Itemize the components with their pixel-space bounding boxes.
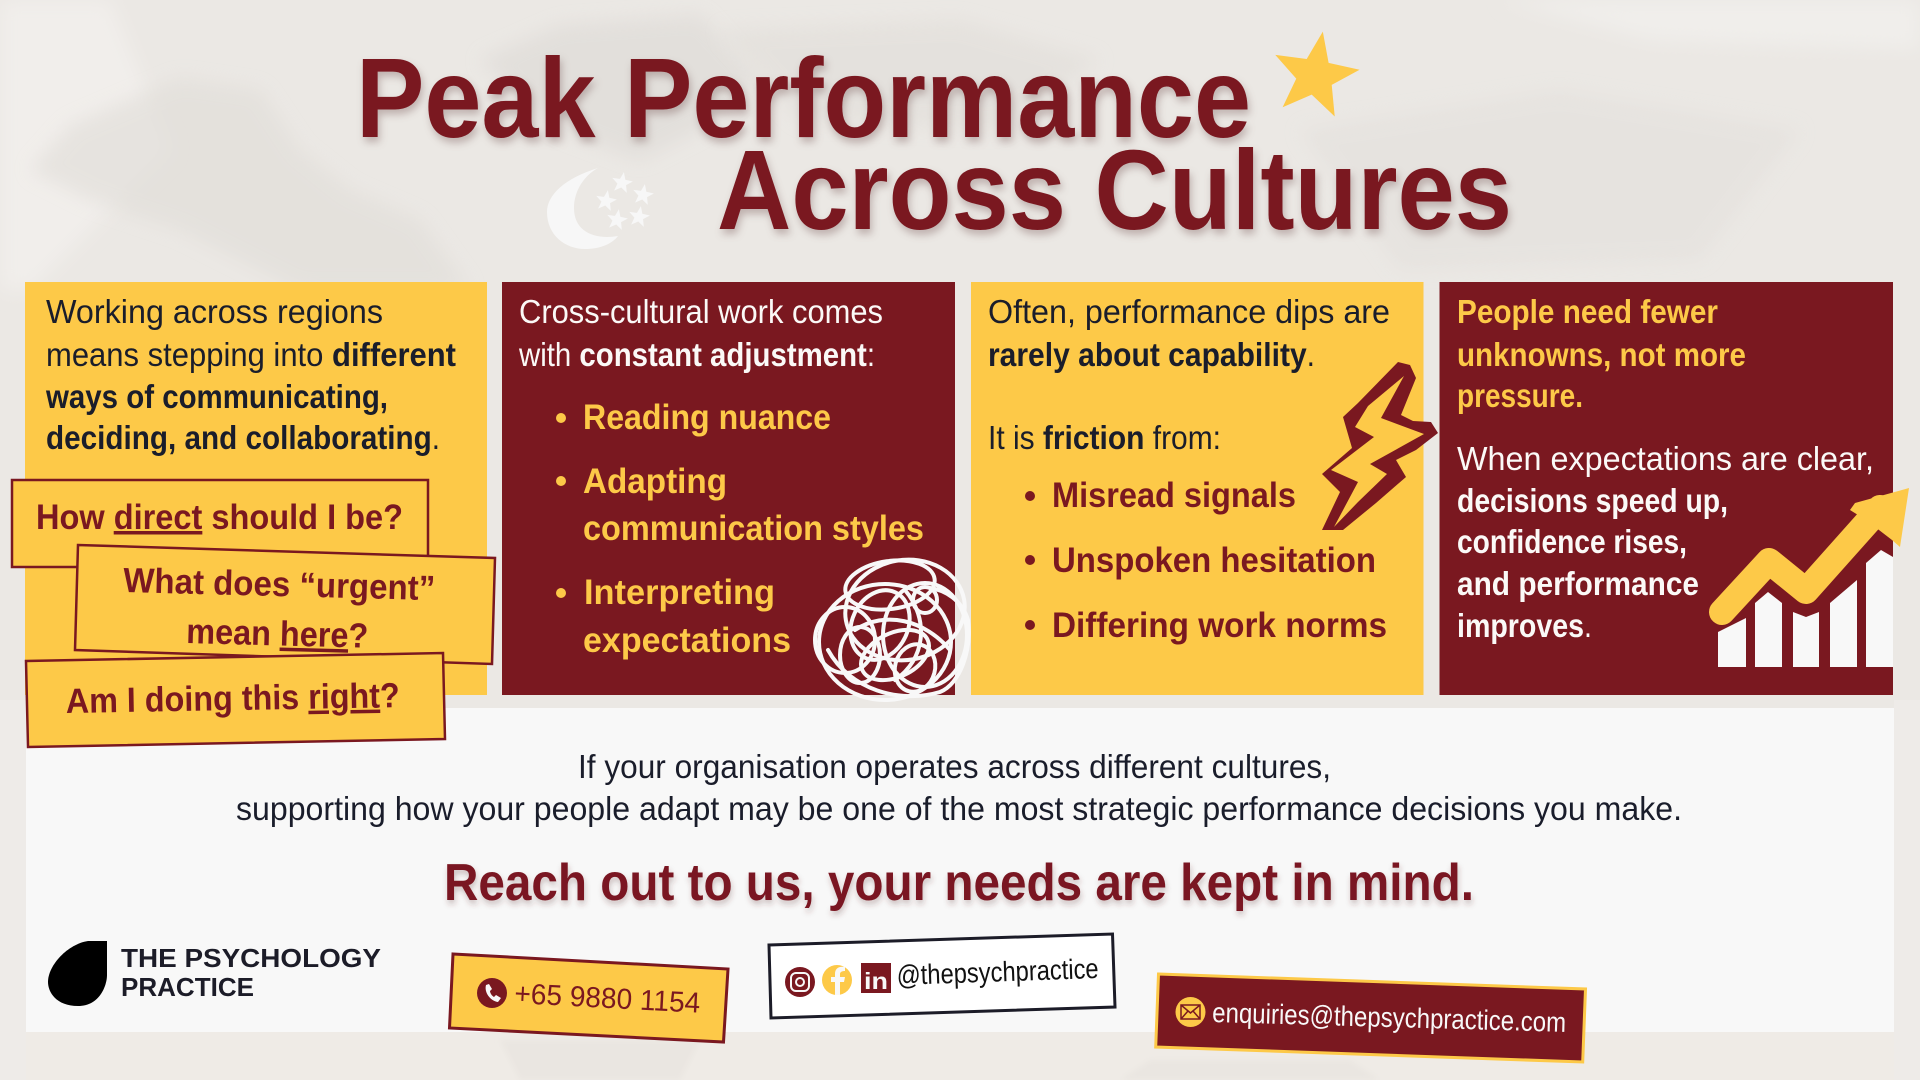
panel: constant adjustment: Cross-cultural work comes	[519, 293, 883, 330]
contact: social media: in	[864, 968, 888, 994]
panel: friction: It is friction from:	[988, 419, 1221, 456]
panel: fewer unknowns: unknowns, not more	[1457, 336, 1746, 373]
panel: fewer unknowns: decisions speed up,	[1457, 482, 1728, 519]
callout: what does urgent mean: What does “urgent”	[123, 561, 436, 608]
callout: what does urgent mean	[75, 545, 495, 664]
panel: working across regions: means stepping into different	[46, 336, 456, 373]
panel: friction: Misread signals	[1052, 476, 1296, 515]
panel: constant adjustment: with constant adjustment:	[518, 336, 875, 373]
panel: friction: rarely about capability.	[988, 336, 1315, 373]
callout: what does urgent mean: mean here?	[186, 612, 369, 656]
panel: constant adjustment: communication styles	[583, 509, 924, 548]
title: Across Cultures	[717, 127, 1512, 253]
panel: constant adjustment: Adapting	[583, 462, 727, 501]
callout: am I doing this right	[26, 653, 445, 747]
panel: fewer unknowns: pressure.	[1457, 377, 1583, 414]
panel: fewer unknowns: improves.	[1457, 607, 1592, 644]
closing statement: supporting how your people adapt may be one of the most strategic performance decisions you make.	[236, 790, 1682, 827]
closing statement	[236, 748, 1682, 827]
logo: the psychology practice: THE PSYCHOLOGY	[121, 943, 381, 973]
panel: friction	[971, 282, 1424, 695]
panel: working across regions: ways of communicating,	[45, 378, 388, 415]
panel: constant adjustment: Reading nuance	[583, 398, 831, 437]
icon: scribble knot	[815, 550, 973, 700]
closing statement: If your organisation operates across different cultures,	[578, 748, 1331, 785]
panel: constant adjustment	[502, 282, 955, 695]
callout: how direct	[12, 480, 428, 567]
contact: social media	[769, 934, 1115, 1018]
panel: working across regions	[25, 282, 487, 695]
panel: constant adjustment: expectations	[583, 621, 791, 660]
icon: yellow star	[1267, 24, 1365, 119]
title: Peak Performance	[356, 35, 1251, 161]
contact: email	[1156, 974, 1586, 1062]
icon: lightning bolt	[1322, 362, 1438, 530]
call to action: Reach out to us, your needs are kept in mind.	[444, 854, 1474, 912]
callout: am I doing this right: Am I doing this right?	[65, 676, 400, 721]
contact: social media: @thepsychpractice	[896, 953, 1099, 991]
panel: working across regions: Working across regions	[46, 293, 383, 330]
logo: the psychology practice	[48, 941, 381, 1006]
contact: phone	[450, 954, 728, 1042]
panel: friction: Differing work norms	[1052, 606, 1387, 645]
bottom white panel	[26, 708, 1894, 1032]
logo: the psychology practice: PRACTICE	[121, 972, 254, 1002]
bar chart with rising arrow	[1718, 488, 1909, 667]
title	[356, 35, 1512, 253]
panel: fewer unknowns: When expectations are clear,	[1457, 440, 1874, 477]
panel: fewer unknowns: confidence rises,	[1457, 523, 1687, 560]
callout: how direct: How direct should I be?	[36, 498, 403, 537]
panel: fewer unknowns: People need fewer	[1457, 293, 1718, 330]
panel: fewer unknowns	[1440, 282, 1893, 695]
panel: friction: Unspoken hesitation	[1052, 541, 1376, 580]
panel: constant adjustment: Interpreting	[584, 573, 775, 612]
panel: working across regions: deciding, and collaborating.	[46, 419, 440, 456]
panel: fewer unknowns: and performance	[1457, 565, 1699, 602]
contact: email: enquiries@thepsychpractice.com	[1212, 997, 1567, 1038]
icon: crescent and five stars	[547, 168, 655, 249]
contact: phone: +65 9880 1154	[514, 978, 701, 1020]
panel: friction: Often, performance dips are	[988, 293, 1390, 330]
